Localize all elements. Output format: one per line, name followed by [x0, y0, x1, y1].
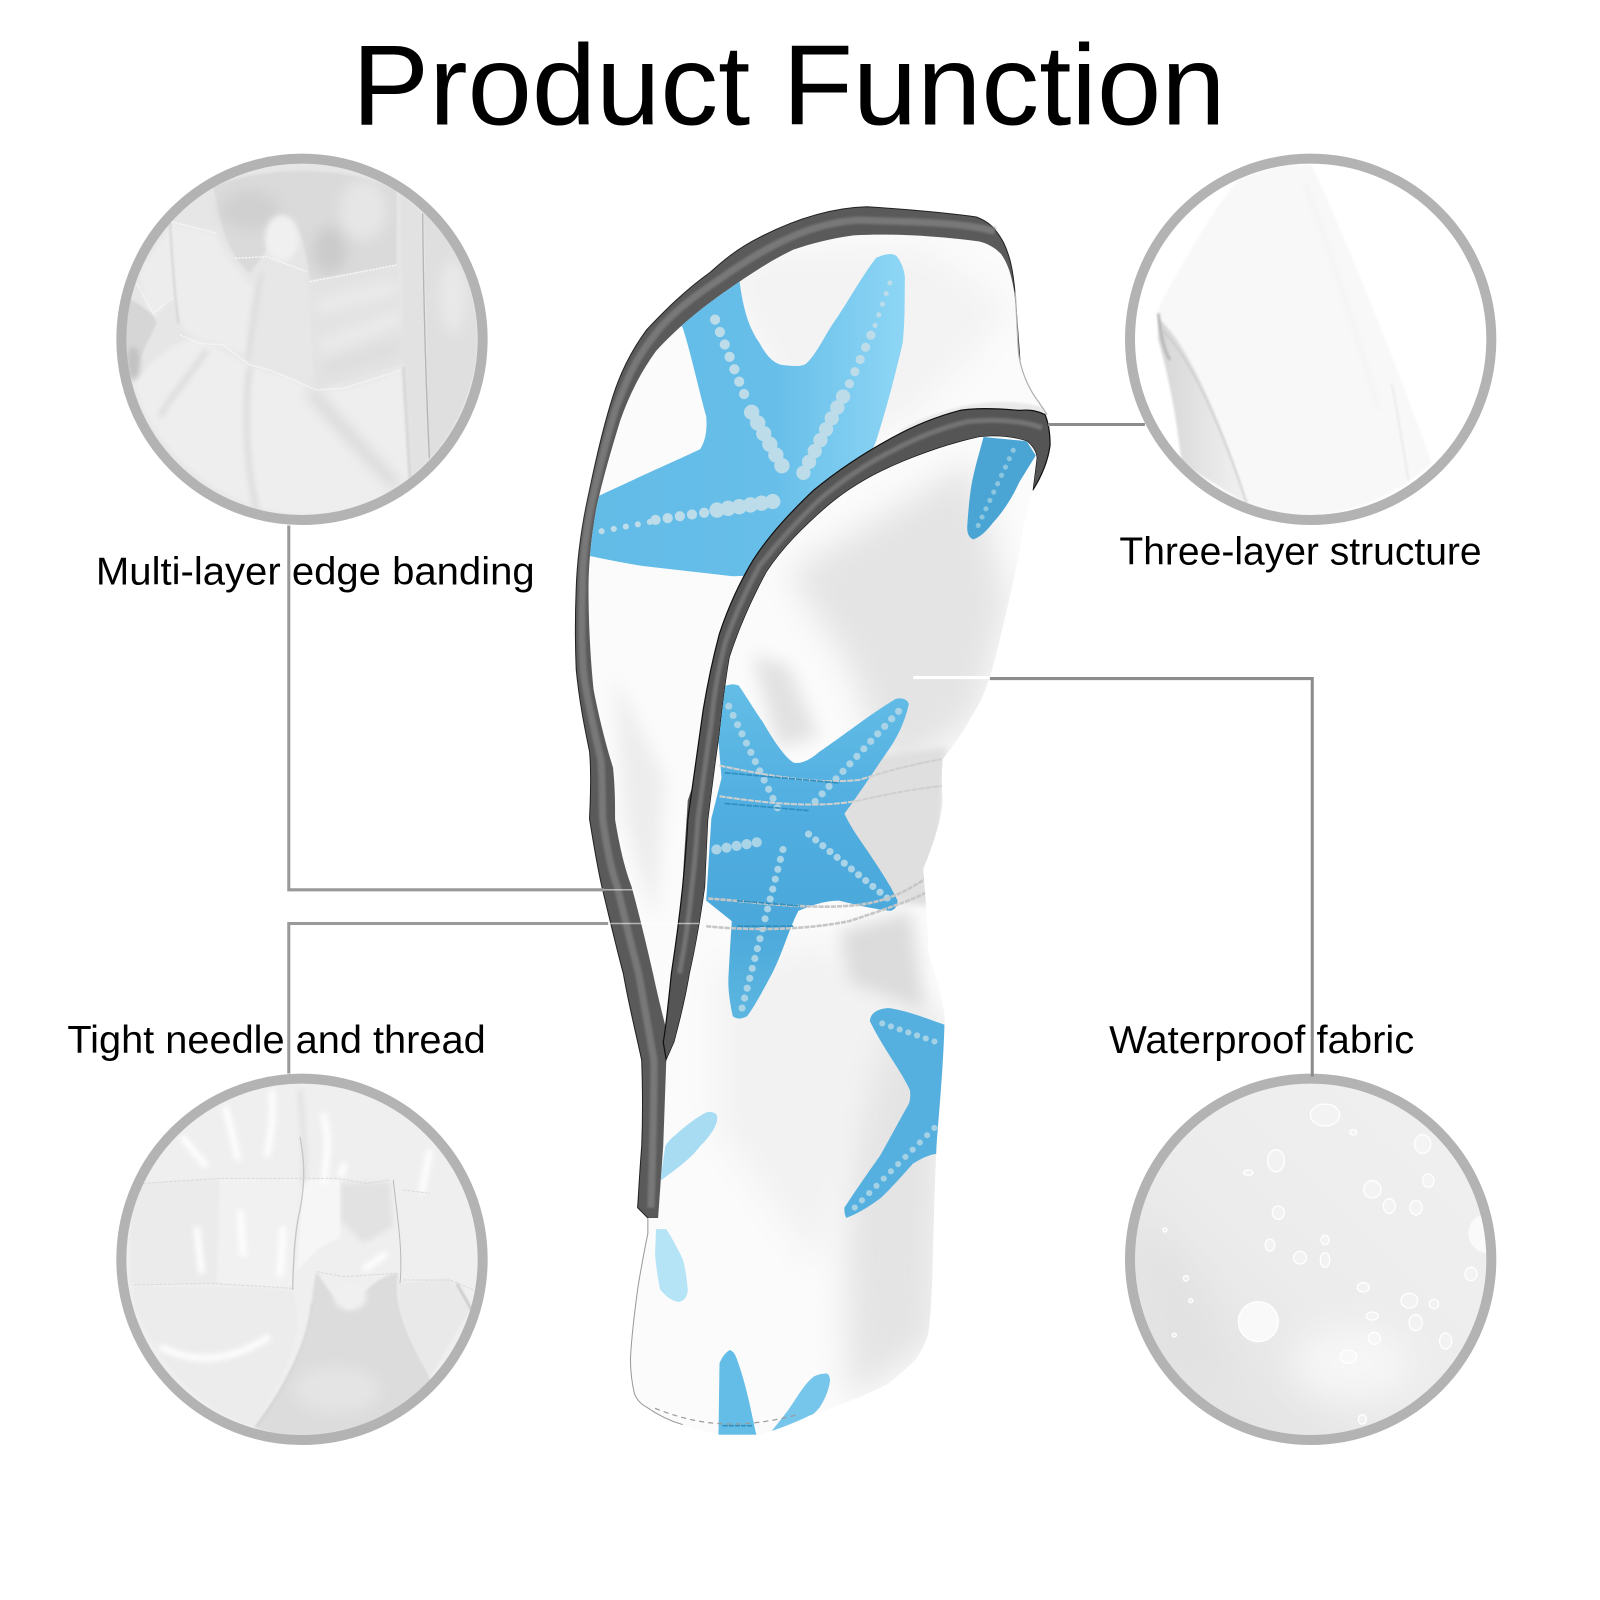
- connector highlights over the cover: [604, 678, 990, 923]
- label: multi-layer edge banding: Multi-layer edge banding: [96, 551, 535, 594]
- starfish E: [660, 1112, 717, 1181]
- neck highlight above front piping: [901, 402, 1044, 435]
- starfish D dots: [855, 1023, 942, 1208]
- starfish D: [844, 1008, 947, 1218]
- fabric shading: [793, 468, 1010, 754]
- label: tight needle and thread: Tight needle and thread: [67, 1019, 486, 1062]
- glossy highlights: [160, 1090, 430, 1358]
- connector: tight needle and thread: [289, 923, 608, 1073]
- starfish B: [706, 684, 909, 1019]
- panel: multi-layer edge banding detail circle: [110, 150, 500, 540]
- title: Product Function: [352, 22, 1226, 149]
- panel: three-layer structure detail circle: [1125, 150, 1515, 540]
- large droplets: [1238, 1302, 1278, 1342]
- infographic canvas: [68, 42, 1496, 1445]
- starfish G: [718, 1350, 756, 1435]
- back panel fabric with starfish: [588, 234, 1024, 1026]
- front panel fabric: [648, 436, 1037, 1435]
- circle ring: [1130, 1079, 1491, 1440]
- circle ring: [121, 159, 483, 520]
- connector: three-layer structure: [1048, 423, 1145, 426]
- starfish A dots: [597, 281, 890, 532]
- water droplets: [1163, 1104, 1477, 1424]
- label: waterproof fabric: Waterproof fabric: [1109, 1019, 1414, 1062]
- connector: multi-layer edge banding: [289, 526, 604, 890]
- connector: waterproof fabric: [990, 679, 1312, 1077]
- panel: tight needle and thread detail circle: [110, 1070, 500, 1460]
- neck silhouette edge: [1015, 292, 1047, 415]
- circle ring: [1130, 159, 1491, 520]
- front piping highlight: [680, 420, 1042, 973]
- starfish B dots: [716, 706, 899, 1008]
- silhouette edge: [630, 1218, 683, 1425]
- starfish C: [967, 437, 1036, 539]
- back panel piping: [575, 207, 1023, 1218]
- panel: waterproof fabric detail circle: [1125, 1070, 1515, 1460]
- starfish F: [655, 1229, 688, 1302]
- ruched stitching: [655, 759, 942, 1426]
- circle ring: [121, 1079, 483, 1440]
- front panel piping: [663, 408, 1050, 1060]
- product: golf club head cover: [573, 205, 1064, 1453]
- starfish A: [573, 254, 905, 576]
- label: three-layer structure: Three-layer structure: [1119, 530, 1482, 573]
- piping highlight: [582, 220, 995, 1208]
